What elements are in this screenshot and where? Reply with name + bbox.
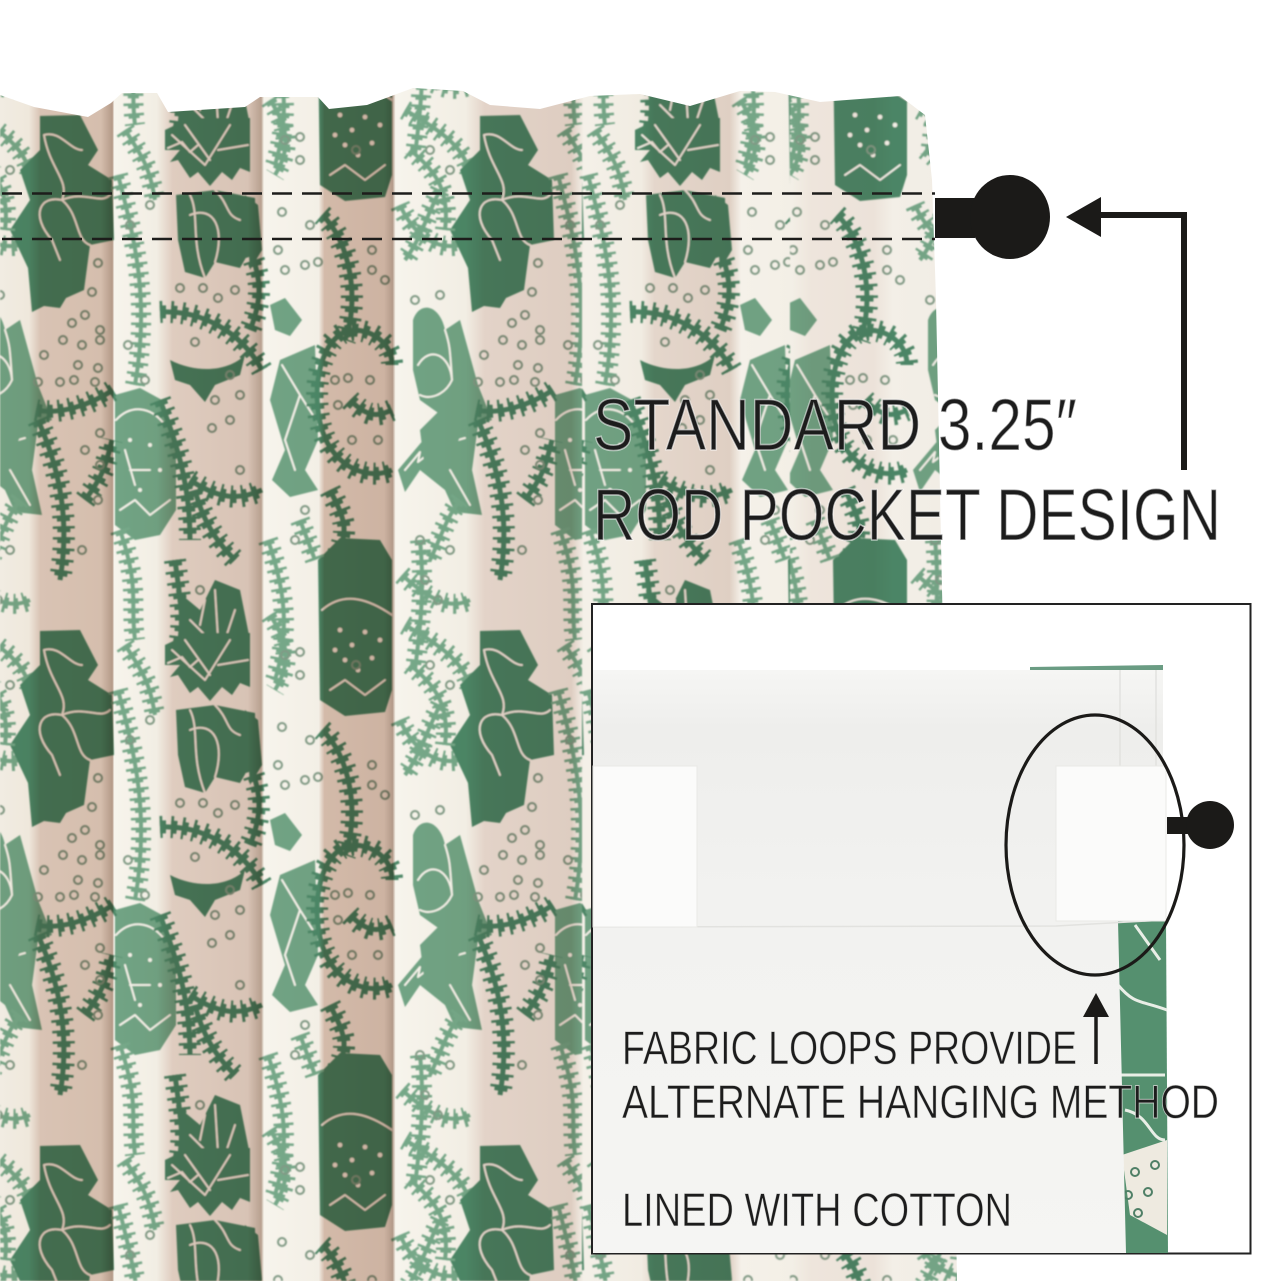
heading: rod pocket design: STANDARD 3.25″	[593, 385, 1077, 466]
panel: fabric loops inset	[592, 604, 1250, 1254]
green fabric edge along top	[1030, 665, 1163, 672]
icon: curtain rod with finial	[935, 175, 1050, 259]
rod pocket dashed lines	[2, 194, 935, 239]
right fabric loop	[1056, 766, 1166, 921]
arrow pointing to rod	[1066, 197, 1184, 470]
icon: small rod with finial	[1167, 801, 1234, 849]
left fabric loop	[593, 766, 697, 927]
text: fabric loops note: FABRIC LOOPS PROVIDE	[622, 1021, 1077, 1074]
heading: rod pocket design	[593, 385, 1221, 556]
white cotton liner	[593, 670, 1163, 1253]
front fabric strip on the right	[1116, 920, 1168, 1253]
arrow pointing to ellipse	[1083, 993, 1109, 1064]
callout ellipse around loop	[1006, 715, 1184, 975]
curtain with green floral print	[0, 80, 960, 1281]
liner hem seams	[593, 670, 1165, 927]
text: lining note: LINED WITH COTTON	[622, 1183, 1012, 1236]
text: fabric loops note	[622, 1021, 1219, 1128]
